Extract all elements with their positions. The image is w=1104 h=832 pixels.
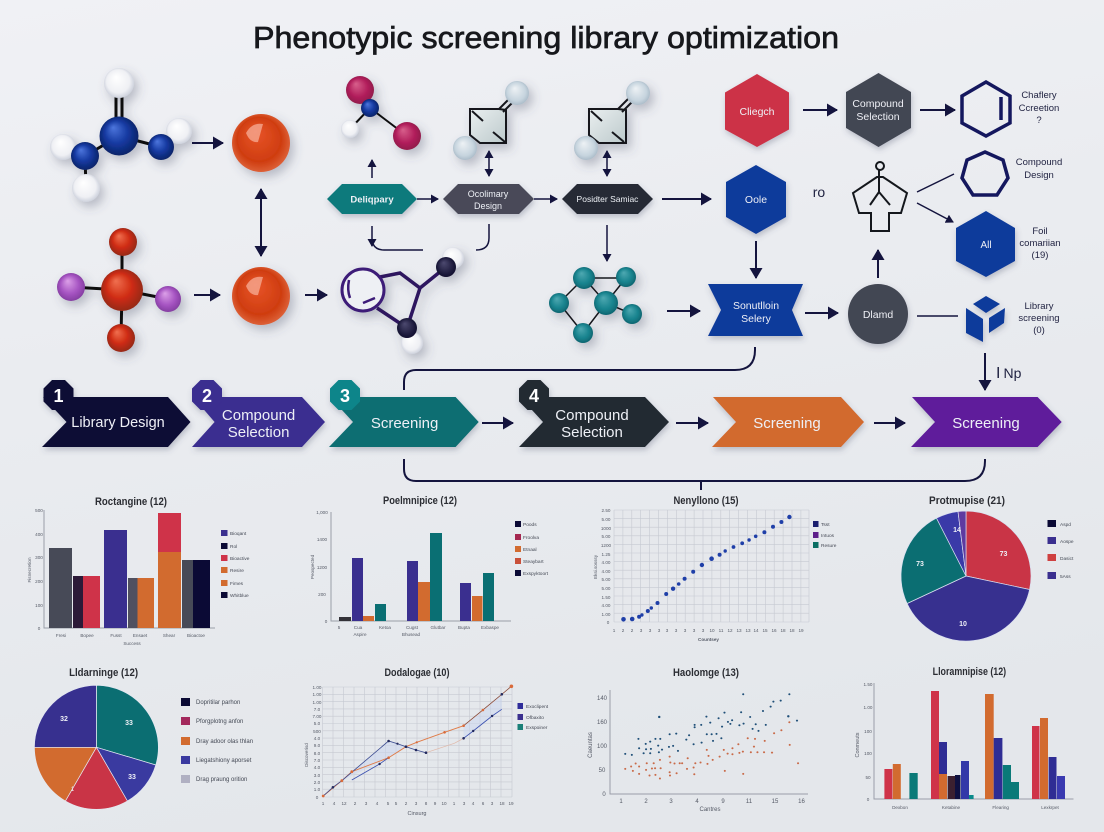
hexagon: red xyxy=(725,74,789,147)
chart 4: pie chart xyxy=(901,495,1074,641)
icon: cube xyxy=(966,296,1005,342)
connector: top loop xyxy=(404,347,755,390)
chart 6: line chart: 4.0 xyxy=(314,765,321,770)
arrows: top row xyxy=(803,109,955,111)
chart 3: scatter line chart: 5.00 xyxy=(602,534,611,539)
chart 6: line chart: 3 xyxy=(365,801,368,806)
arrow: circle up xyxy=(877,250,879,278)
title: Phenotypic screening library optimization xyxy=(253,20,839,55)
step 5: screening orange: Screening xyxy=(753,415,821,432)
chart 3: scatter line chart: 5.00 xyxy=(602,586,611,591)
chart 4: pie chart: 73 xyxy=(1000,551,1007,558)
chart 2: grouped bar chart: Cua xyxy=(354,625,363,630)
chart 7: scatter plot: 11 xyxy=(746,799,753,805)
step 4: compound selection: Selection xyxy=(561,424,623,441)
chart 3: scatter line chart: Nenyllono (15) xyxy=(674,495,739,507)
arrow: banner to circle xyxy=(805,312,838,314)
label: foil comparison: Foil xyxy=(1032,226,1048,237)
chart 4: pie chart: 10 xyxy=(959,621,967,628)
chart 8: grouped bar chart: Dexbon xyxy=(892,805,908,810)
chart 6: line chart: 8 xyxy=(425,801,428,806)
chart 2: grouped bar chart: 1200 xyxy=(317,565,328,570)
chart 1: bar chart xyxy=(27,496,250,646)
label: foil comparison xyxy=(1019,226,1061,261)
chart 6: line chart: 2 xyxy=(354,801,357,806)
label: library screening: (0) xyxy=(1033,325,1045,336)
chart 5: pie chart: Liegatshiony aporset xyxy=(196,758,252,764)
process node: grey xyxy=(443,184,534,214)
chart 3: scatter line chart: 1.25 xyxy=(602,552,611,557)
chart 3: scatter line chart: 1200 xyxy=(601,543,612,548)
label: ro: ro xyxy=(813,184,825,200)
chart 8: grouped bar chart: Ketabine xyxy=(942,805,961,810)
chart 2: grouped bar chart: Aspire xyxy=(353,632,367,637)
chart 8: grouped bar chart: 100 xyxy=(864,751,872,756)
arrows: from flask xyxy=(917,174,954,222)
chart 8: grouped bar chart: Lloramnipise (12) xyxy=(933,666,1006,678)
chart 1: bar chart: 300 xyxy=(35,555,43,560)
step 2: compound selection: Selection xyxy=(228,424,289,441)
chart 8: grouped bar chart: Flearing xyxy=(992,805,1009,810)
step 2: compound selection xyxy=(192,380,325,447)
chart 1: bar chart: Fisnecretion xyxy=(27,557,32,583)
arrow: step 4 to 5 xyxy=(676,422,708,424)
molecule: red and purple xyxy=(57,228,181,352)
chart 1: bar chart: Fimes xyxy=(230,581,244,587)
chart 5: pie chart: Drag praung orition xyxy=(196,777,247,783)
step 1: library design: 1 xyxy=(53,386,64,406)
chart 7: scatter plot: 1 xyxy=(619,799,623,805)
chart 1: bar chart: 500 xyxy=(35,508,43,513)
chart 3: scatter line chart: 10 xyxy=(709,628,715,633)
arrow: step 5 to 6 xyxy=(874,422,905,424)
chart 3: scatter line chart: 0 xyxy=(607,620,610,625)
chart 4: pie chart: Aspd xyxy=(1060,522,1071,528)
chart 6: line chart: 19 xyxy=(508,801,514,806)
chart 3: scatter line chart: Intuos xyxy=(821,533,835,539)
circle node xyxy=(848,284,908,344)
hexagon: compound selection: Compound xyxy=(852,98,904,110)
circle node: Dlamd xyxy=(863,309,893,321)
chart 8: grouped bar chart: 1.50 xyxy=(864,682,873,687)
process node: dark: Posidter Samiac xyxy=(577,194,639,204)
chart 6: line chart: 10 xyxy=(441,801,447,806)
chart 3: scatter line chart: 3 xyxy=(640,628,643,633)
chart 7: scatter plot: 15 xyxy=(772,799,779,805)
chart 3: scatter line chart: 1 xyxy=(613,628,616,633)
chart 2: grouped bar chart: Steaybart xyxy=(523,559,544,565)
chart 3: scatter line chart: 11 xyxy=(719,628,724,633)
label: library screening: screening xyxy=(1018,313,1060,324)
chart 3: scatter line chart: 3 xyxy=(666,628,669,633)
hexagon: compound selection: Selection xyxy=(856,111,900,123)
chart 3: scatter line chart: 3 xyxy=(702,628,705,633)
chart 3: scatter line chart: 18 xyxy=(780,628,786,633)
chart 8: grouped bar chart: 50 xyxy=(865,775,871,780)
chart 5: pie chart: Dopritilar parhon xyxy=(196,700,240,706)
chart 5: pie chart: Lldarninge (12) xyxy=(69,667,138,679)
step 3: screening xyxy=(329,380,479,447)
chart 6: line chart: Ofbaxito xyxy=(526,715,544,721)
chart 6: line chart: 5 xyxy=(395,801,398,806)
chart 2: grouped bar chart: 1,000 xyxy=(316,510,328,515)
hexagon: all xyxy=(956,211,1015,277)
chart 1: bar chart: Bioactoe xyxy=(187,633,205,638)
molecule: square with silver spheres 1 xyxy=(453,81,529,160)
chart 5: pie chart: 33 xyxy=(125,720,133,727)
label: inp: INp xyxy=(996,365,1022,382)
chart 3: scatter line chart: 3 xyxy=(658,628,661,633)
line: circle to cube xyxy=(917,315,958,317)
chart 7: scatter plot: 100 xyxy=(597,744,608,750)
chart 4: pie chart: 14 xyxy=(953,527,961,534)
chart 3: scatter line chart: 4.00 xyxy=(602,560,611,565)
arrow: down from hexagon xyxy=(755,241,757,278)
chart 6: line chart: 4 xyxy=(472,801,475,806)
chart 6: line chart: 3 xyxy=(415,801,418,806)
sphere: orange bottom xyxy=(232,267,290,325)
chart 2: grouped bar chart: Exbaspe xyxy=(481,625,499,630)
process node: dark xyxy=(562,184,653,214)
chart 1: bar chart: 0 xyxy=(38,626,41,631)
chart 6: line chart: 4 xyxy=(333,801,336,806)
chart 3: scatter line chart: 4.00 xyxy=(602,569,611,574)
chart 6: line chart: 1.00 xyxy=(313,685,322,690)
step 5: screening orange xyxy=(712,397,864,447)
hexagon: blue xyxy=(726,165,786,234)
chart 7: scatter plot: 140 xyxy=(597,696,608,702)
sphere: orange top xyxy=(232,114,290,172)
chart 2: grouped bar chart: 5 xyxy=(338,625,341,630)
chart 3: scatter line chart: 2 xyxy=(631,628,634,633)
banner: selection xyxy=(708,284,803,336)
chart 7: scatter plot: Cantres xyxy=(699,807,721,813)
chart 3: scatter line chart: 3 xyxy=(684,628,687,633)
chart 3: scatter line chart: 2 xyxy=(622,628,625,633)
icon: flask structure xyxy=(853,162,907,231)
arrows: left molecules xyxy=(192,143,327,295)
chart 6: line chart: 3.0 xyxy=(314,773,321,778)
chart 6: line chart: 12 xyxy=(341,801,347,806)
chart 3: scatter line chart xyxy=(593,495,837,642)
chart 2: grouped bar chart: Cugst xyxy=(406,625,419,630)
chart 2: grouped bar chart: Peospected xyxy=(310,554,315,579)
chart 6: line chart: 3 xyxy=(463,801,466,806)
chart 3: scatter line chart: 1.00 xyxy=(602,612,611,617)
chart 1: bar chart: Success xyxy=(123,641,141,646)
chart 2: grouped bar chart: Poods xyxy=(523,522,537,528)
arrows: middle process xyxy=(372,151,711,311)
chart 6: line chart: 5.0 xyxy=(314,721,321,726)
chart 6: line chart: 9 xyxy=(434,801,437,806)
chart 7: scatter plot: 9 xyxy=(721,799,725,805)
chart 3: scatter line chart: 19 xyxy=(798,628,804,633)
chart 6: line chart: 1.0 xyxy=(314,787,321,792)
chart 3: scatter line chart: 5.00 xyxy=(602,577,611,582)
chart 3: scatter line chart: Tsst xyxy=(821,522,830,528)
chart 3: scatter line chart: 3 xyxy=(649,628,652,633)
chart 3: scatter line chart: 18 xyxy=(789,628,795,633)
chart 3: scatter line chart: 16 xyxy=(771,628,777,633)
chart 5: pie chart: 32 xyxy=(60,716,68,723)
chart 6: line chart: 0 xyxy=(316,795,319,800)
arrow: step 3 to 4 xyxy=(482,422,513,424)
chart 6: line chart: 2 xyxy=(405,801,408,806)
step 4: compound selection xyxy=(519,380,669,447)
chart 8: grouped bar chart: 100 xyxy=(864,729,872,734)
chart 6: line chart: Dodalogae (10) xyxy=(384,667,450,679)
molecule: purple ring xyxy=(342,247,464,354)
step 2: compound selection: 2 xyxy=(202,386,212,406)
chart 7: scatter plot: 50 xyxy=(599,768,606,774)
step 4: compound selection: Compound xyxy=(555,407,629,424)
step 1: library design: Library Design xyxy=(71,415,165,431)
chart 2: grouped bar chart: Bupta xyxy=(458,625,470,630)
chart 2: grouped bar chart: 0 xyxy=(325,619,328,624)
chart 6: line chart: 1.00 xyxy=(313,700,322,705)
hexagon: blue: Oole xyxy=(745,194,767,206)
chart 4: pie chart: Aospe xyxy=(1060,539,1074,545)
chart 6: line chart: 2.0 xyxy=(314,780,321,785)
chart 4: pie chart: 73 xyxy=(916,561,924,568)
chart 6: line chart: 3 xyxy=(491,801,494,806)
chart 4: pie chart: Dasict xyxy=(1060,556,1074,562)
chart 2: grouped bar chart: Etnaal xyxy=(523,547,537,553)
chart 3: scatter line chart: Eksi.sosssy xyxy=(593,554,598,579)
chart 5: pie chart xyxy=(34,667,253,809)
chart 1: bar chart: 200 xyxy=(35,579,43,584)
chart 6: line chart: 7.0 xyxy=(314,707,321,712)
molecule: square with silver spheres 2 xyxy=(574,81,650,160)
label: compound design: Design xyxy=(1024,170,1054,181)
label: library screening: Library xyxy=(1024,301,1054,312)
label: chemistry creation: Chaflery xyxy=(1021,90,1057,101)
chart 8: grouped bar chart xyxy=(855,666,1074,810)
chart 8: grouped bar chart: 0 xyxy=(867,797,870,802)
chart 1: bar chart: Resire xyxy=(230,568,244,574)
chart 6: line chart: 8.0 xyxy=(314,751,321,756)
chart 6: line chart: 1 xyxy=(453,801,456,806)
step 3: screening: Screening xyxy=(371,415,438,432)
chart 2: grouped bar chart: Froolva xyxy=(523,535,539,541)
chart 2: grouped bar chart: Ketoa xyxy=(379,625,391,630)
connector: bottom loop xyxy=(404,459,985,490)
step 6: screening purple: Screening xyxy=(952,415,1020,432)
label: chemistry creation: Ccreetion xyxy=(1019,103,1059,114)
chart 2: grouped bar chart: Poelmnipice (12) xyxy=(383,495,457,507)
label: chemistry creation: ? xyxy=(1036,115,1042,126)
step 1: library design xyxy=(42,380,190,447)
chart 2: grouped bar chart: 1400 xyxy=(317,537,328,542)
chart 3: scatter line chart: 12 xyxy=(727,628,733,633)
process node: grey: Design xyxy=(474,201,502,211)
chart 3: scatter line chart: 13 xyxy=(736,628,742,633)
chart 6: line chart: 4 xyxy=(376,801,379,806)
chart 6: line chart: 6 xyxy=(482,801,485,806)
chart 7: scatter plot: Haolomge (13) xyxy=(673,667,739,679)
molecule: blue and white xyxy=(50,68,192,202)
arrow: inp xyxy=(984,353,986,390)
chart 1: bar chart: Fresi xyxy=(56,633,66,638)
chart 2: grouped bar chart: Glutbar xyxy=(430,625,446,630)
chart 7: scatter plot: 3 xyxy=(669,799,673,805)
chart 8: grouped bar chart: 1.00 xyxy=(864,705,873,710)
chart 1: bar chart: Rol xyxy=(230,544,237,550)
chart 7: scatter plot: 16 xyxy=(798,799,805,805)
molecule: pink xyxy=(341,76,421,150)
hexagon: compound selection xyxy=(846,73,911,147)
chart 6: line chart: 1.00 xyxy=(313,692,322,697)
chart 7: scatter plot: Caeuntas xyxy=(588,732,594,758)
chart 1: bar chart: Shear xyxy=(163,633,176,638)
chart 4: pie chart: 5Ass xyxy=(1060,574,1071,580)
chart 3: scatter line chart: 2.50 xyxy=(602,508,611,513)
hexagon: navy outline xyxy=(962,82,1010,136)
label: foil comparison: comariian xyxy=(1019,238,1061,249)
chart 1: bar chart: Fusst xyxy=(110,633,122,638)
chart 2: grouped bar chart: Bhusead xyxy=(402,632,421,637)
chart 6: line chart: Exoclipent xyxy=(526,704,549,710)
label: chemistry creation xyxy=(1019,90,1059,126)
chart 3: scatter line chart: 15 xyxy=(762,628,768,633)
chart 6: line chart xyxy=(304,667,549,817)
chart 3: scatter line chart: 3 xyxy=(675,628,678,633)
chart 2: grouped bar chart: Exspyktoort xyxy=(523,571,549,577)
chart 6: line chart: 9.0 xyxy=(314,743,321,748)
chart 1: bar chart: 100 xyxy=(35,603,43,608)
label: compound design xyxy=(1016,157,1062,181)
chart 1: bar chart: Bioqant xyxy=(230,531,247,537)
chart 5: pie chart: 33 xyxy=(128,774,136,781)
label: library screening xyxy=(1018,301,1060,336)
chart 3: scatter line chart: Resure xyxy=(821,543,837,549)
chart 5: pie chart: 1 xyxy=(71,787,75,793)
process node: teal: Deliqpary xyxy=(350,194,394,206)
chart 5: pie chart: Pforgplotng anfon xyxy=(196,719,243,725)
step 3: screening: 3 xyxy=(340,386,350,406)
chart 6: line chart: 18 xyxy=(499,801,505,806)
chart 8: grouped bar chart: Conmeuts xyxy=(855,732,861,758)
chart 6: line chart: 1 xyxy=(322,801,325,806)
chart 3: scatter line chart: Countsey xyxy=(698,637,719,642)
chart 3: scatter line chart: 1000 xyxy=(601,526,612,531)
label: foil comparison: (19) xyxy=(1032,250,1048,261)
chart 4: pie chart: Protmupise (21) xyxy=(929,495,1005,507)
step 6: screening purple xyxy=(911,397,1062,447)
chart 7: scatter plot: 0 xyxy=(602,792,606,798)
chart 1: bar chart: 400 xyxy=(35,532,43,537)
chart 3: scatter line chart: 3 xyxy=(693,628,696,633)
chart 1: bar chart: Bopee xyxy=(80,633,94,638)
step 2: compound selection: Compound xyxy=(222,407,295,424)
chart 1: bar chart: Whitblue xyxy=(230,593,249,599)
chart 6: line chart: Exspoiner xyxy=(526,725,548,731)
chart 6: line chart: Discoverisd xyxy=(304,743,309,767)
chart 6: line chart: Cinsurg xyxy=(408,811,426,817)
chart 2: grouped bar chart xyxy=(310,495,549,637)
chart 3: scatter line chart: 4.00 xyxy=(602,603,611,608)
hexagon: all: All xyxy=(980,240,992,251)
label: compound design: Compound xyxy=(1016,157,1062,168)
chart 1: bar chart: Bioactive xyxy=(230,556,250,562)
chart 6: line chart: 7.00 xyxy=(313,714,322,719)
chart 6: line chart: 4.0 xyxy=(314,736,321,741)
chart 3: scatter line chart: 1.50 xyxy=(602,595,611,600)
chart 3: scatter line chart: 5.00 xyxy=(602,517,611,522)
banner: selection: Sonutlloin xyxy=(733,300,779,312)
chart 6: line chart: 7.0 xyxy=(314,758,321,763)
chart 7: scatter plot xyxy=(588,667,808,813)
process node: teal xyxy=(327,184,417,214)
step 4: compound selection: 4 xyxy=(529,386,539,406)
chart 2: grouped bar chart: 200 xyxy=(318,592,326,597)
chart 6: line chart: 5 xyxy=(387,801,390,806)
chart 7: scatter plot: 160 xyxy=(597,720,608,726)
banner: selection: Selery xyxy=(741,313,772,325)
chart 5: pie chart: Dray adoor olas thlan xyxy=(196,739,253,745)
hexagon: red: Cliegch xyxy=(739,106,775,118)
process node: grey: Ocolimary xyxy=(468,189,509,199)
chart 6: line chart: 500 xyxy=(313,729,321,734)
heptagon: navy outline xyxy=(962,152,1008,195)
chart 1: bar chart: Ensaet xyxy=(133,633,148,638)
chart 3: scatter line chart: 13 xyxy=(745,628,751,633)
chart 7: scatter plot: 4 xyxy=(695,799,699,805)
molecule: teal network xyxy=(549,267,642,343)
chart 8: grouped bar chart: Lexkrpet xyxy=(1041,805,1060,810)
chart 1: bar chart: Roctangine (12) xyxy=(95,496,167,508)
chart 7: scatter plot: 2 xyxy=(644,799,648,805)
chart 3: scatter line chart: 14 xyxy=(753,628,759,633)
